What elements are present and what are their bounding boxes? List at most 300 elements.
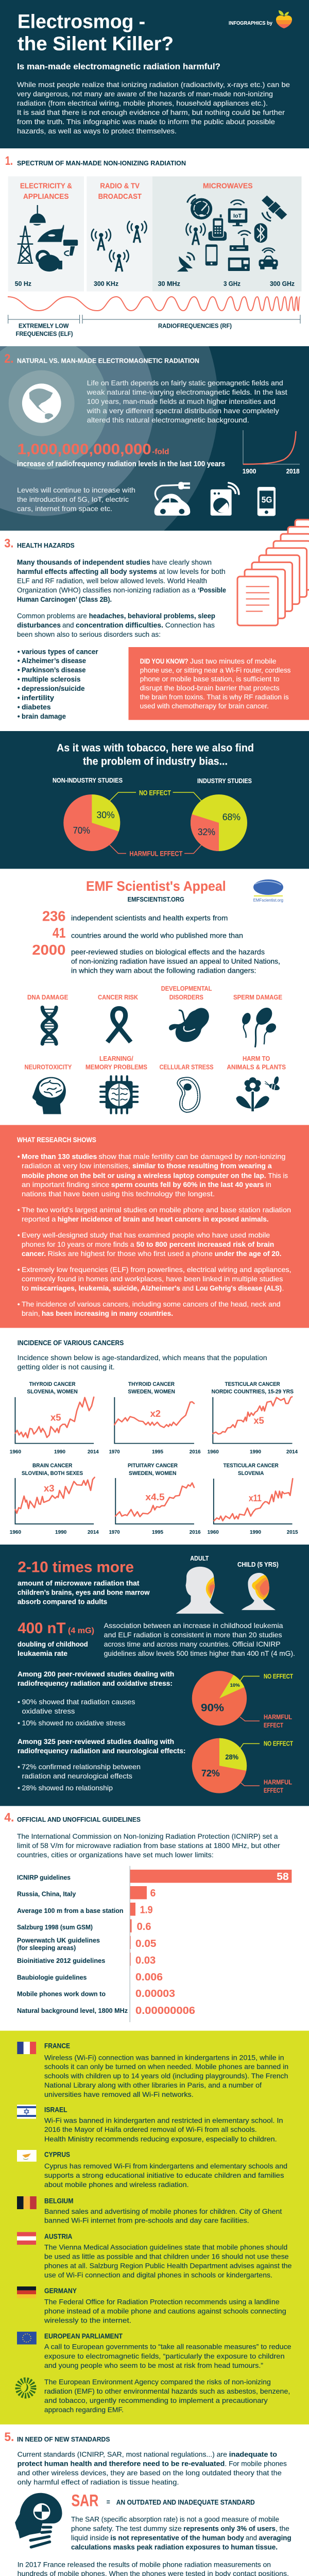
entry: Cyprus: Cyprus has removed Wi-Fi from kindergartens and elementary schools and [44, 2162, 287, 2170]
chart: pituitary cancer Sweden [109, 1463, 201, 1535]
text: oxidative stress studies: • [18, 1698, 20, 1706]
list: serious disorders: depression/suicide [22, 684, 85, 692]
logo: EMFscientist [253, 879, 283, 903]
callout: did you know: Just two minutes of mobile [190, 657, 276, 665]
pie chart: industry studies [191, 777, 252, 851]
bullet: male fertility: an important finding since [22, 1180, 110, 1189]
heading: SAR: = [107, 2498, 110, 2506]
entry: Israel: Wi-Fi was banned in kindergarten and restricted in elementary school. In [44, 2116, 283, 2124]
entry: Germany: The Federal Office for Radiation Protection recommends using a landline [44, 2297, 280, 2306]
chart: pituitary cancer Sweden: SWEDEN, WOMEN [129, 1470, 177, 1477]
pie chart: industry studies: 68% [222, 812, 241, 822]
text: studies: harmful effects affecting all body systems [17, 567, 157, 575]
list: serious disorders: diabetes [22, 703, 51, 711]
title: Electrosmog - [18, 11, 145, 33]
bullet: animal studies [18, 1206, 291, 1223]
text: studies [17, 558, 226, 603]
stats: scientists, countries, studies [32, 908, 280, 974]
bar chart: exposure limits: 0.03 [135, 1955, 156, 1966]
chart: brain cancer Slovenia: BRAIN CANCER [32, 1463, 72, 1469]
text: neurological effects studies: 28% showed no relationship [22, 1784, 113, 1792]
bullet: male fertility: More than 130 studies [22, 1153, 97, 1161]
section 3: health hazards [4, 520, 309, 720]
text: leukemia association: and ELF radiation is consistent in more than 20 studies [104, 1631, 282, 1639]
heading: natural vs man-made: 2. [4, 352, 13, 366]
stat: 400 nT: leukaemia rate [18, 1649, 67, 1657]
text: studies: ELF and RF radiation, well below allowed levels. World Health [17, 577, 207, 585]
text: age-standardized [18, 1353, 267, 1371]
text: oxidative stress studies: • [18, 1719, 20, 1727]
labels: radiation dangers [25, 985, 286, 1071]
text: SAR explanation: phone safety. The test dummy size [71, 2524, 182, 2533]
panel: what research shows [0, 1125, 309, 1328]
heading: new standards [4, 2430, 110, 2444]
chart: brain cancer Slovenia: 1960 [10, 1529, 21, 1535]
text: oxidative stress studies: Among 200 peer-reviewed studies dealing with [18, 1670, 174, 1678]
heading: natural vs man-made [4, 352, 199, 366]
callout: did you know: DID YOU KNOW? [140, 657, 188, 665]
bullet: male fertility: in [266, 1180, 271, 1189]
bullet: animal studies: • [18, 1206, 20, 1214]
pie chart: oxidative stress: 90% [201, 1702, 224, 1714]
panel: microwaves: IoT [233, 213, 242, 219]
bar chart: exposure limits: 0.00003 [135, 1988, 175, 1999]
bar chart: exposure limits: 58 [277, 1871, 289, 1883]
heading: new standards: IN NEED OF NEW STANDARDS [17, 2435, 110, 2443]
callout: did you know: disrupt the blood-brain barrier that protects [140, 684, 280, 692]
chart: thyroid cancer Slovenia: SLOVENIA, WOMEN [27, 1389, 78, 1395]
callout: did you know [129, 647, 309, 720]
text: SAR explanation [71, 2515, 291, 2551]
heading: industry bias [57, 742, 254, 768]
legend: no effect: NO EFFECT [139, 788, 171, 796]
entry: Austria: use of Wi-Fi connection and digital phones in schools or kindergartens. [44, 2270, 272, 2279]
list: serious disorders: • [18, 693, 20, 702]
bullet: brain cancer risk: 50 to 800 percent increased risk of brain [136, 1240, 274, 1248]
labels: radiation dangers: NEUROTOXICITY [25, 1064, 72, 1071]
intro text: very dangerous, not many are aware of the hazards of man-made non-ionizing [17, 90, 273, 98]
section: EMF scientist's appeal [25, 878, 286, 1114]
list: serious disorders: brain damage [22, 712, 66, 720]
title [18, 11, 174, 55]
stats: scientists, countries, studies: countries around the world who published more than [71, 931, 243, 939]
text: studies: Human Carcinogen’ (Class 2B). [17, 595, 112, 603]
icon: crash test dummy head [15, 2493, 62, 2547]
bullet: extremely low frequencies: Extremely low frequencies (ELF) from powerlines, electrical wiring and appliances, [22, 1265, 291, 1274]
pie chart: oxidative stress: NO EFFECT [264, 1672, 293, 1680]
intro text: It is said that there is not enough evidence of harm, but nothing could be further [17, 108, 285, 116]
stats: scientists, countries, studies: independent scientists and health experts from [71, 914, 228, 922]
entry: Cyprus: CYPRUS [44, 2150, 70, 2158]
text: leukemia association: guidelines allow levels 500 times higher than 400 nT (4 mG). [104, 1649, 295, 1657]
text: SAR explanation: averaging [259, 2534, 291, 2542]
text: neurological effects studies [18, 1737, 185, 1792]
icons: appliances [18, 205, 78, 272]
section 5: new standards [4, 2430, 292, 2576]
list: serious disorders [18, 647, 98, 720]
bullet: cancer incidence: brain, [22, 1309, 40, 1317]
chart: frequency wave [8, 297, 300, 311]
text: neurological effects studies: radiation and neurological effects [22, 1772, 132, 1780]
chart: radiation growth [243, 430, 300, 475]
list: serious disorders: infertility [22, 693, 54, 702]
panel: radio and TV broadcast: RADIO & TV [100, 181, 140, 190]
legend: harmful effect [110, 845, 201, 858]
text: oxidative stress studies: 90% showed that radiation causes [22, 1698, 135, 1706]
bar chart: exposure limits: Russia, China, Italy [17, 1890, 76, 1898]
bullet: male fertility: radiation at very low intensities, [22, 1161, 130, 1170]
entry: Israel: 2016 the Mayor of Haifa ordered removal of Wi-Fi from all schools. [44, 2125, 257, 2133]
entry: Austria [17, 2232, 292, 2279]
entry: European Environment Agency: approach regarding EMF. [44, 2405, 124, 2414]
chart: testicular cancer Nordic countries: 1990 [250, 1449, 261, 1455]
text: SAR explanation: , the [276, 2524, 289, 2533]
list: serious disorders: various types of cancer [22, 647, 98, 655]
panel: radio and TV broadcast [87, 176, 152, 292]
text: oxidative stress studies: 10% showed no oxidative stress [22, 1719, 125, 1727]
panel: children and other evidence [0, 1545, 309, 1806]
list: serious disorders: • [18, 647, 20, 655]
pie chart: oxidative stress: EFFECT [264, 1721, 283, 1729]
bar chart: exposure limits: 0.05 [135, 1938, 157, 1950]
entry: Germany: wirelessly to the internet. [44, 2316, 131, 2324]
heading: industry bias: the problem of industry bias... [83, 756, 228, 768]
section 1: spectrum [5, 154, 302, 337]
text: studies: at low levels for both [159, 567, 226, 575]
chart: brain cancer Slovenia: 2014 [88, 1529, 99, 1535]
stat: 2-10 times more: 2-10 times more [18, 1559, 134, 1576]
bullet: brain cancer risk: under the age of 20. [215, 1249, 281, 1258]
bullet: male fertility: similar to those resulting from wearing a [132, 1161, 272, 1170]
section 4: guidelines [4, 1811, 291, 2022]
text: ICNIRP limit: The International Commission on Non-Ionizing Radiation Protection (ICNIRP) set a [17, 1832, 278, 1840]
text: natural fields: altered this natural electromagnetic background. [87, 416, 249, 424]
entry: Israel [17, 2105, 283, 2143]
scale: frequency ranges: FREQUENCIES (ELF) [16, 331, 73, 337]
text: neurological effects studies: radiofrequency radiation and neurological effects: [18, 1747, 185, 1755]
entry: European Parliament: exposure to electromagnetic fields, “particularly the exposure to children [44, 2352, 285, 2360]
bullet: animal studies: The two world’s largest animal studies on mobile phone and base station radiation [22, 1206, 291, 1214]
pie chart: non-industry studies: 30% [97, 810, 115, 820]
heading: appeal: EMFSCIENTIST.ORG [128, 895, 184, 903]
panel: industry bias [0, 731, 309, 869]
bullet: brain cancer risk [18, 1231, 281, 1258]
chart: pituitary cancer Sweden: 1995 [152, 1529, 163, 1535]
entry: Cyprus: supports a strong educational initiative to educate children and families [44, 2171, 284, 2179]
bar chart: exposure limits: 0.006 [135, 1972, 163, 1983]
chart: brain cancer Slovenia: 1990 [55, 1529, 67, 1535]
text: neurological effects studies: 72% confirmed relationship between [22, 1762, 141, 1771]
pie chart: non-industry studies: 70% [73, 825, 90, 836]
text: France measurements: In 2017 France released the results of mobile phone radiation measurements on [18, 2560, 271, 2568]
pie chart: neurological effects: 72% [201, 1768, 220, 1778]
chart: thyroid cancer Sweden: THYROID CANCER [128, 1381, 175, 1387]
text: current standards: only harmful effect of radiation is tissue heating. [18, 2478, 179, 2486]
text: leukemia association [104, 1621, 295, 1657]
bullet: extremely low frequencies: and [182, 1284, 194, 1292]
intro text: radiation (from electrical wiring, mobile phones, household appliances etc.). [17, 99, 268, 107]
heading: new standards: 5. [4, 2430, 14, 2444]
bullet: male fertility: This is [268, 1172, 288, 1180]
heading: spectrum: 1. [5, 154, 13, 168]
stats: scientists, countries, studies: peer-reviewed studies on biological effects and the hazards [71, 947, 265, 956]
icons: radio towers [92, 221, 147, 272]
list: serious disorders: Alzheimer’s disease [22, 656, 86, 665]
text: studies: Many thousands of independent studies [17, 558, 150, 566]
text: future levels: Levels will continue to increase with [17, 486, 135, 494]
bullet: male fertility: mobile phone on the belt or using a wireless laptop computer on the lap. [22, 1172, 266, 1180]
chart: testicular cancer Slovenia: SLOVENIA [238, 1470, 264, 1477]
illustration: adult and child head absorption: CHILD (5 YRS) [237, 1561, 279, 1568]
list: serious disorders: • [18, 656, 20, 665]
text: current standards: and other wireless devices, they are based on the long outdated theory that the [18, 2469, 282, 2477]
section: incidence of various cancers [10, 1338, 298, 1535]
text: current standards: Current standards (ICNIRP, SAR, most national regulations...) are [18, 2450, 227, 2459]
bullet: brain cancer risk: Risks are highest for those who first used a phone [48, 1249, 213, 1258]
pie chart: non-industry studies: NON-INDUSTRY STUDIES [53, 776, 123, 784]
bar chart: exposure limits: Natural background level, 1800 MHz [17, 2007, 128, 2014]
text: natural fields: Life on Earth depends on fairly static geomagnetic fields and [87, 379, 283, 387]
heading: guidelines [4, 1811, 141, 1825]
bar chart: exposure limits [17, 1866, 291, 2022]
callout: did you know: the brain from toxins. That is why RF radiation is [140, 693, 289, 701]
heading: guidelines: OFFICIAL AND UNOFFICIAL GUIDELINES [17, 1816, 141, 1823]
text: SAR explanation: liquid inside [71, 2534, 109, 2542]
chart: thyroid cancer Slovenia: 1990 [54, 1449, 65, 1455]
scale: frequency ranges: RADIOFREQUENCIES (RF) [158, 324, 232, 330]
panel: electricity and appliances [8, 176, 84, 292]
list: serious disorders: • [18, 684, 20, 692]
text: France measurements [18, 2560, 289, 2576]
text: future levels [17, 486, 135, 513]
bullet: cancer incidence: The incidence of various cancers, including some cancers of the head, neck and [22, 1300, 281, 1308]
text: age-standardized: getting older is not causing it. [18, 1363, 115, 1371]
bar chart: exposure limits: Baubiologie guidelines [17, 1973, 87, 1981]
text: current standards: . For mobile phones [225, 2459, 287, 2467]
illustration: adult and child head absorption [176, 1555, 279, 1614]
stats: scientists, countries, studies: 236 [42, 908, 65, 924]
intro text: from the truth. This infographic was made to inform the public about possible [17, 117, 275, 126]
labels: radiation dangers: DISORDERS [169, 994, 203, 1001]
entry: Belgium: BELGIUM [44, 2196, 73, 2205]
text: neurological effects studies: Among 325 peer-reviewed studies dealing with [18, 1737, 174, 1745]
text: current standards: protect human health and therefore need to be re-evaluated [18, 2459, 225, 2467]
panel: microwaves: MICROWAVES [203, 181, 253, 190]
stats: scientists, countries, studies: 41 [53, 925, 65, 941]
heading: natural vs man-made: NATURAL VS. MAN-MADE ELECTROMAGNETIC RADIATION [17, 357, 199, 365]
bullet: brain cancer risk: phones for 10 years or more finds a [22, 1240, 134, 1248]
icon: earth [22, 383, 61, 423]
text: common problems: been shown also to serious disorders such as: [17, 630, 161, 638]
entry: Germany: phone instead of a mobile phone and cautions against schools connecting [44, 2307, 286, 2315]
chart: thyroid cancer Sweden: x2 [150, 1409, 161, 1419]
entry: Germany: GERMANY [44, 2286, 77, 2295]
pie chart: industry studies: 32% [198, 827, 215, 837]
callout: did you know: phone use, or sitting near a Wi-Fi router, cordless [140, 666, 291, 674]
labels: radiation dangers: CANCER RISK [98, 994, 138, 1001]
text: oxidative stress studies: oxidative stress [22, 1707, 75, 1715]
entry: Israel: ISRAEL [44, 2105, 67, 2113]
heading: SAR [71, 2492, 255, 2510]
labels: radiation dangers: HARM TO [243, 1055, 270, 1062]
text: SAR explanation: The SAR (specific absorption rate) is not a good measure of mobile [71, 2515, 279, 2523]
text: common problems: concentration difficulties. [76, 621, 163, 629]
stat: 400 nT: 400 nT [18, 1620, 65, 1637]
intro text: While most people realize that ionizing radiation (radioactivity, x-rays etc.) can be [17, 80, 290, 89]
chart: thyroid cancer Slovenia: x5 [50, 1413, 61, 1423]
chart: radiation growth: 1900 [243, 468, 256, 475]
entry: Belgium [17, 2196, 282, 2225]
entry: France [17, 2041, 288, 2098]
text: neurological effects studies: • [18, 1784, 20, 1792]
entry: France: schools with children up to 14 years old (including playgrounds). The French [44, 2072, 288, 2080]
text: common problems: disturbances [17, 621, 61, 629]
heading: SAR: AN OUTDATED AND INADEQUATE STANDARD [116, 2498, 255, 2506]
icons: microwave devices [177, 195, 288, 272]
stats: scientists, countries, studies: 2000 [32, 942, 65, 958]
labels: radiation dangers: DEVELOPMENTAL [161, 985, 212, 992]
chart: brain cancer Slovenia: x3 [44, 1483, 55, 1494]
bullet: extremely low frequencies: Lou Gehrig's disease (ALS) [196, 1284, 282, 1292]
entry: European Environment Agency: and tobacco, urgently recommending to implement a precautionary [44, 2396, 268, 2404]
chart: pituitary cancer Sweden: 1970 [109, 1529, 120, 1535]
entry: Austria: AUSTRIA [44, 2232, 72, 2240]
text: studies: have clearly shown [152, 558, 212, 566]
text: natural fields [87, 379, 287, 424]
bullet: extremely low frequencies: commonly found in homes and workplaces, have been linked in multiple studies [22, 1275, 283, 1283]
text: SAR explanation: represents only 3% of users [183, 2524, 276, 2533]
list: serious disorders: • [18, 666, 20, 674]
text: common problems: Connection has [165, 621, 215, 629]
heading: health hazards [4, 537, 75, 550]
icons: electric car, smart washer, 5G phone [154, 482, 276, 516]
entry: European Environment Agency: The European Environment Agency compared the risks of non-ionizing [44, 2378, 271, 2386]
text: oxidative stress studies [18, 1670, 174, 1727]
panel: microwaves [152, 176, 302, 292]
panel: radio and TV broadcast: 300 KHz [94, 280, 118, 287]
stat: 400 nT [18, 1620, 94, 1657]
entry: European Parliament [17, 2332, 291, 2369]
chart: radiation growth: 2018 [286, 468, 300, 475]
bullet: brain cancer risk: • [18, 1231, 20, 1239]
panel: microwaves: 30 MHz [158, 280, 180, 287]
bar chart: exposure limits: Mobile phones work down to [17, 1990, 106, 1998]
entry: European Parliament: and young people who seem to be most at risk from head tumours.” [44, 2361, 263, 2369]
bar chart: exposure limits: 0.6 [137, 1921, 151, 1933]
heading: spectrum: SPECTRUM OF MAN-MADE NON-IONIZING RADIATION [17, 159, 186, 167]
bullet: brain cancer risk: cancer. [22, 1249, 46, 1258]
illustration: adult and child head absorption: ADULT [190, 1555, 209, 1562]
text: common problems: Common problems are [17, 612, 87, 620]
list: serious disorders: multiple sclerosis [22, 675, 81, 683]
bullet: male fertility: sperm counts fell by 60% in the last 40 years [111, 1180, 264, 1189]
chart: testicular cancer Slovenia: 1990 [250, 1529, 261, 1535]
labels: radiation dangers: SPERM DAMAGE [233, 994, 282, 1001]
heading: health hazards: 3. [4, 537, 13, 550]
panel: microwaves: 3 GHz [224, 280, 241, 287]
entry: Israel: Health Ministry recommends reducing exposure, especially to children. [44, 2134, 277, 2143]
bar chart: exposure limits: 0.00000006 [135, 2005, 195, 2016]
chart: pituitary cancer Sweden: 2016 [190, 1529, 201, 1535]
pie chart: oxidative stress: HARMFUL [264, 1713, 292, 1721]
logo: EMFscientist: EMFscientist.org [253, 897, 283, 903]
pie chart: neurological effects [192, 1738, 293, 1794]
bullet: extremely low frequencies: to [22, 1284, 29, 1292]
credit and logo [229, 10, 292, 29]
stats: scientists, countries, studies: in which they warn about the following radiation dangers: [71, 966, 256, 974]
big number: increase: -fold [152, 447, 169, 456]
chart: brain cancer Slovenia [10, 1463, 99, 1535]
entry: European Parliament: A call to European governments to “take all reasonable measures” to reduce [44, 2342, 291, 2350]
big number: increase: increase of radiofrequency radiation levels in the last 100 years [17, 460, 225, 468]
chart: brain cancer Slovenia: SLOVENIA, BOTH SEXES [22, 1470, 83, 1477]
chart: thyroid cancer Slovenia: 2014 [88, 1449, 99, 1455]
entry: France: Wireless (Wi-Fi) connection was banned in kindergartens in 2015, while in [44, 2054, 284, 2062]
pie chart: oxidative stress: 10% [230, 1683, 240, 1688]
entry: Cyprus [17, 2150, 287, 2189]
stat: 2-10 times more [18, 1559, 150, 1605]
scale: frequency ranges [8, 315, 300, 337]
chart: pituitary cancer Sweden: PITUITARY CANCER [128, 1463, 178, 1469]
entry: European Parliament: EUROPEAN PARLIAMENT [44, 2332, 123, 2340]
text: SAR explanation: is not representative of the human body [110, 2534, 244, 2542]
entry: Belgium: banned Wi-Fi internet from pre-schools and day care facilities. [44, 2216, 249, 2225]
callout: did you know: used with chemotherapy for brain cancer. [140, 702, 269, 710]
chart: testicular cancer Nordic countries: 2014 [286, 1449, 298, 1455]
list: serious disorders: • [18, 675, 20, 683]
big number: increase: 1,000,000,000,000 [18, 441, 151, 457]
entry: European Environment Agency: radiation (EMF) to other environmental hazards such as asbestos, benzene, [44, 2387, 290, 2395]
heading: health hazards: HEALTH HAZARDS [17, 541, 75, 549]
heading: guidelines: 4. [4, 1811, 14, 1825]
panel: natural vs man-made radiation [0, 346, 309, 531]
pie chart: oxidative stress [192, 1671, 293, 1729]
chart: thyroid cancer Sweden: 2016 [190, 1449, 201, 1455]
bullet: brain cancer risk: Every well-designed study that has examined people who have used mobile [22, 1231, 270, 1239]
legend: harmful effect: HARMFUL EFFECT [129, 850, 183, 858]
bullet: male fertility: nations that have been using this technology the longest. [22, 1190, 215, 1198]
heading: SAR: SAR [71, 2492, 98, 2510]
entry: Austria: be used as little as possible and that children under 16 should not use these [44, 2252, 289, 2260]
heading: appeal: EMF Scientist's Appeal [86, 878, 226, 894]
panel: natural vs man-made radiation: 5G [262, 495, 272, 504]
icon: document stack [237, 520, 309, 625]
entry: France: universities have removed all Wi-Fi networks. [44, 2090, 194, 2098]
text: ICNIRP limit: countries, cities or organizations have set much lower limits: [17, 1851, 214, 1859]
text: ICNIRP limit [17, 1832, 280, 1859]
panel: header [0, 0, 309, 148]
labels: radiation dangers: CELLULAR STRESS [160, 1064, 213, 1071]
text: SAR explanation: and [246, 2534, 257, 2542]
pie chart: industry studies: INDUSTRY STUDIES [197, 777, 252, 785]
intro text: hazards, as well as ways to protect themselves. [17, 127, 177, 135]
entry: Belgium: Banned sales and advertising of mobile phones for children. City of Ghent [44, 2207, 282, 2215]
entry: France: National Library along with other libraries in Paris, and a number of [44, 2081, 262, 2089]
text: future levels: the introduction of 5G, IoT, electric [17, 495, 129, 503]
text: future levels: cars, internet from space etc. [17, 504, 112, 513]
labels: radiation dangers: DNA DAMAGE [27, 994, 68, 1001]
entry: Germany [17, 2286, 286, 2324]
stat: 2-10 times more: amount of microwave radiation that [18, 1579, 140, 1587]
text: natural fields: with a very different spectral distribution have completely [87, 406, 279, 415]
chart: testicular cancer Slovenia: 2015 [287, 1529, 298, 1535]
big number: increase [17, 441, 225, 468]
bullet: extremely low frequencies: . [282, 1284, 284, 1292]
labels: radiation dangers: MEMORY PROBLEMS [85, 1064, 147, 1071]
bullet: extremely low frequencies [18, 1265, 291, 1292]
bullet: animal studies: higher incidence of brain and heart cancers in exposed animals. [58, 1215, 269, 1223]
bullet: cancer incidence: has been increasing in many countries. [42, 1309, 173, 1317]
